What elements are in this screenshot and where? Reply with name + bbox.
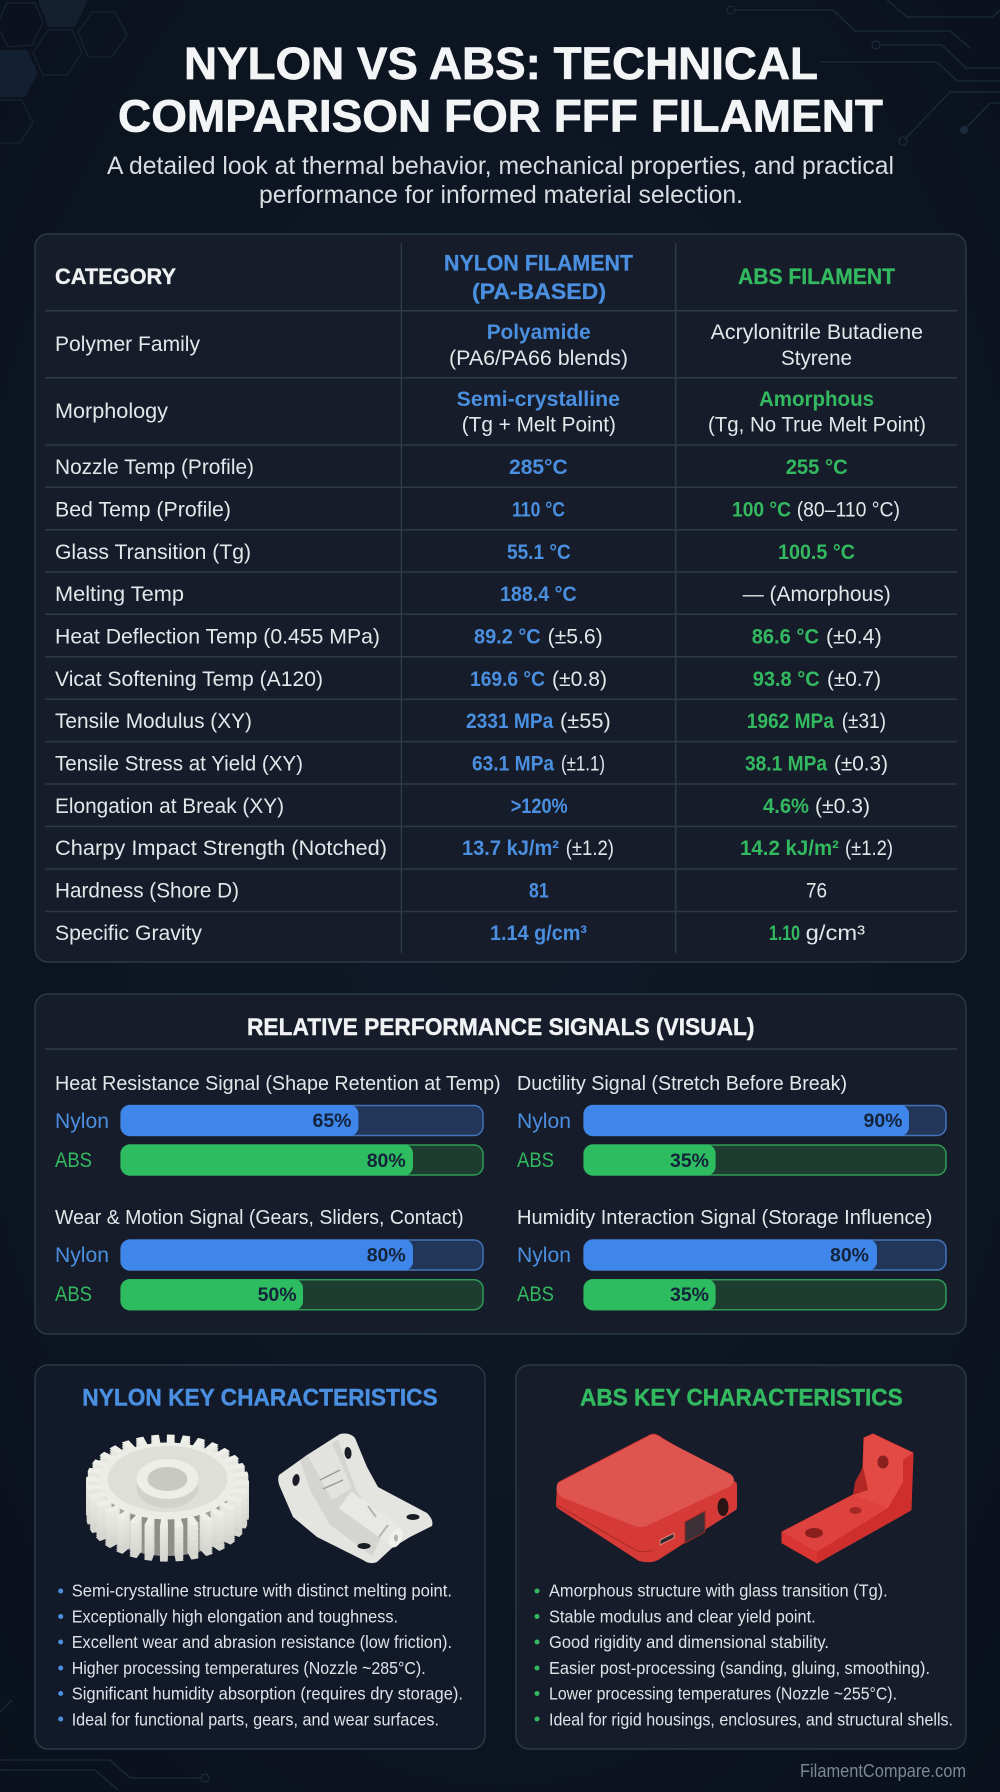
- row: nozzle temp: 285°C: [509, 456, 568, 479]
- row: specific gravity: 1.10: [769, 922, 800, 945]
- row: tensile modulus: 1962 MPa: [747, 710, 834, 733]
- row: melting temp: [55, 583, 891, 606]
- row: tensile stress at yield: (±0.3): [834, 752, 888, 776]
- chart: ductility signal: Nylon: [517, 1110, 571, 1133]
- row: elongation at break: 4.6%: [763, 795, 809, 818]
- chart: heat resistance signal: [55, 1072, 501, 1176]
- panel: relative performance signals: [35, 994, 966, 1334]
- chart: humidity interaction signal: [517, 1206, 946, 1310]
- row: heat deflection temp: (±0.4): [826, 626, 882, 648]
- nylon bullet list: Ideal for functional parts, gears, and wear surfaces.: [72, 1710, 439, 1730]
- row: charpy impact strength: 13.7 kJ/m²: [462, 837, 559, 860]
- row: bed temp: Bed Temp (Profile): [55, 498, 231, 522]
- row: vicat softening temp: (±0.7): [827, 668, 881, 691]
- row: polymer family: (PA6/PA66 blends): [449, 347, 628, 370]
- row: heat deflection temp: 86.6 °C: [752, 626, 819, 648]
- row: charpy impact strength: 14.2 kJ/m²: [740, 837, 839, 860]
- nylon bullet list: [58, 1581, 463, 1730]
- row: specific gravity: [55, 922, 865, 945]
- chart: wear and motion signal: 80%: [367, 1244, 406, 1266]
- row: specific gravity: g/cm³: [806, 922, 865, 945]
- row: glass transition: Glass Transition (Tg): [55, 541, 251, 564]
- row: tensile modulus: 2331 MPa: [466, 710, 554, 733]
- row: heat deflection temp: [55, 626, 882, 648]
- row: polymer family: Acrylonitrile Butadiene: [711, 321, 923, 344]
- icon: white nylon hinge bracket: [278, 1434, 432, 1563]
- row: polymer family: Polyamide: [487, 321, 591, 344]
- nylon bullet list: Significant humidity absorption (requires dry storage).: [72, 1684, 463, 1704]
- row: vicat softening temp: [55, 668, 881, 691]
- nylon bullet list: Exceptionally high elongation and toughness.: [72, 1606, 398, 1626]
- abs bullet list: [534, 1581, 953, 1730]
- row: hardness: Hardness (Shore D): [55, 880, 239, 902]
- row: polymer family: [55, 321, 923, 370]
- row: elongation at break: >120%: [511, 795, 568, 818]
- chart: ductility signal: Ductility Signal (Stretch Before Break): [517, 1072, 847, 1095]
- table header row: NYLON FILAMENT: [444, 250, 634, 276]
- footer credit: FilamentCompare.com: [800, 1761, 966, 1781]
- chart: wear and motion signal: Wear & Motion Signal (Gears, Sliders, Contact): [55, 1206, 464, 1229]
- signals heading: RELATIVE PERFORMANCE SIGNALS (VISUAL): [247, 1014, 754, 1041]
- row: melting temp: — (Amorphous): [743, 583, 891, 606]
- table header row: ABS FILAMENT: [738, 264, 896, 289]
- row: nozzle temp: 255 °C: [786, 456, 848, 479]
- row: bed temp: [55, 498, 900, 522]
- title: COMPARISON FOR FFF FILAMENT: [118, 90, 883, 142]
- title: NYLON VS ABS: TECHNICAL: [184, 38, 818, 89]
- icon: red abs enclosure: [557, 1438, 733, 1558]
- row: tensile stress at yield: [55, 752, 888, 776]
- row: specific gravity: Specific Gravity: [55, 922, 203, 945]
- row: nozzle temp: Nozzle Temp (Profile): [55, 456, 254, 479]
- abs bullet list: Good rigidity and dimensional stability.: [549, 1632, 829, 1652]
- row: tensile stress at yield: Tensile Stress at Yield (XY): [55, 752, 303, 776]
- chart: ductility signal: 90%: [864, 1110, 902, 1132]
- row: elongation at break: (±0.3): [815, 795, 870, 818]
- row: vicat softening temp: 93.8 °C: [753, 668, 820, 691]
- row: vicat softening temp: (±0.8): [552, 668, 607, 691]
- row: hardness: 81: [529, 880, 549, 902]
- table header row: CATEGORY: [55, 264, 176, 289]
- subtitle: performance for informed material selection.: [259, 181, 743, 209]
- row: morphology: (Tg + Melt Point): [462, 414, 616, 437]
- title: [118, 38, 883, 142]
- row: bed temp: (80–110 °C): [797, 498, 900, 522]
- row: melting temp: 188.4 °C: [500, 583, 577, 606]
- panel: nylon key characteristics: [35, 1365, 485, 1749]
- row: morphology: Semi-crystalline: [457, 388, 620, 411]
- nylon bullet list: Excellent wear and abrasion resistance (low friction).: [72, 1632, 452, 1652]
- chart: wear and motion signal: [55, 1206, 483, 1310]
- row: elongation at break: Elongation at Break (XY): [55, 795, 284, 818]
- row: charpy impact strength: (±1.2): [566, 837, 614, 860]
- table header row: [55, 250, 896, 304]
- icon: red abs bracket: [782, 1434, 913, 1563]
- row: heat deflection temp: (±5.6): [548, 626, 603, 648]
- chart: ductility signal: ABS: [517, 1149, 554, 1172]
- nylon heading: NYLON KEY CHARACTERISTICS: [82, 1384, 438, 1412]
- table background: [35, 234, 966, 962]
- chart: wear and motion signal: Nylon: [55, 1244, 109, 1267]
- subtitle: A detailed look at thermal behavior, mechanical properties, and practical: [107, 152, 894, 180]
- abs bullet list: Amorphous structure with glass transition (Tg).: [549, 1581, 888, 1601]
- row: morphology: Amorphous: [759, 388, 874, 411]
- row: heat deflection temp: 89.2 °C: [474, 626, 541, 648]
- chart: humidity interaction signal: 80%: [830, 1244, 869, 1266]
- row: tensile modulus: (±55): [560, 710, 611, 733]
- row: morphology: (Tg, No True Melt Point): [708, 414, 926, 437]
- row: tensile modulus: Tensile Modulus (XY): [55, 710, 252, 733]
- row: morphology: Morphology: [55, 400, 169, 423]
- chart: heat resistance signal: 65%: [312, 1110, 352, 1132]
- table header row: (PA-BASED): [472, 279, 606, 304]
- signals background: [35, 994, 966, 1334]
- row: tensile modulus: (±31): [842, 710, 886, 733]
- row: charpy impact strength: (±1.2): [845, 837, 893, 860]
- chart: humidity interaction signal: ABS: [517, 1283, 554, 1306]
- row: morphology: [55, 388, 926, 437]
- row: glass transition: 55.1 °C: [507, 541, 571, 564]
- icon: white nylon gear: [94, 1439, 242, 1557]
- row: vicat softening temp: 169.6 °C: [470, 668, 545, 691]
- chart: wear and motion signal: 50%: [258, 1284, 297, 1306]
- panel: comparison table: [35, 234, 966, 962]
- chart: wear and motion signal: ABS: [55, 1283, 92, 1306]
- row: glass transition: [55, 541, 855, 564]
- chart: ductility signal: [517, 1072, 946, 1176]
- row: specific gravity: 1.14 g/cm³: [490, 922, 587, 945]
- nylon bullet list: Semi-crystalline structure with distinct melting point.: [72, 1581, 452, 1601]
- row: nozzle temp: [55, 456, 848, 479]
- abs heading: ABS KEY CHARACTERISTICS: [580, 1384, 903, 1412]
- abs bullet list: Ideal for rigid housings, enclosures, and structural shells.: [549, 1710, 953, 1730]
- chart: heat resistance signal: 80%: [367, 1150, 406, 1172]
- row: hardness: 76: [806, 880, 827, 902]
- row: vicat softening temp: Vicat Softening Temp (A120): [55, 668, 323, 691]
- row: charpy impact strength: Charpy Impact Strength (Notched): [55, 837, 387, 860]
- row: polymer family: Polymer Family: [55, 333, 200, 356]
- row: melting temp: Melting Temp: [55, 583, 184, 606]
- chart: heat resistance signal: Nylon: [55, 1110, 109, 1133]
- row: tensile stress at yield: 63.1 MPa: [472, 752, 554, 776]
- panel: abs key characteristics: [516, 1365, 966, 1749]
- abs bullet list: Easier post-processing (sanding, gluing, smoothing).: [549, 1658, 930, 1678]
- chart: heat resistance signal: Heat Resistance Signal (Shape Retention at Temp): [55, 1072, 501, 1095]
- row: glass transition: 100.5 °C: [778, 541, 855, 564]
- row: tensile stress at yield: (±1.1): [561, 752, 605, 776]
- row: bed temp: 100 °C: [732, 498, 791, 522]
- chart: ductility signal: 35%: [670, 1150, 709, 1172]
- nylon panel background: [35, 1365, 485, 1749]
- chart: humidity interaction signal: Nylon: [517, 1244, 571, 1267]
- subtitle: [107, 152, 894, 209]
- row: tensile modulus: [55, 710, 886, 733]
- chart: humidity interaction signal: 35%: [670, 1284, 709, 1306]
- abs bullet list: Stable modulus and clear yield point.: [549, 1606, 816, 1626]
- chart: humidity interaction signal: Humidity Interaction Signal (Storage Influence): [517, 1206, 932, 1229]
- row: heat deflection temp: Heat Deflection Temp (0.455 MPa): [55, 626, 380, 648]
- row: charpy impact strength: [55, 837, 893, 860]
- abs panel background: [516, 1365, 966, 1749]
- abs bullet list: Lower processing temperatures (Nozzle ~255°C).: [549, 1684, 897, 1704]
- row: elongation at break: [55, 795, 870, 818]
- row: hardness: [55, 880, 827, 902]
- table grid: [45, 243, 957, 953]
- row: bed temp: 110 °C: [512, 498, 565, 522]
- row: polymer family: Styrene: [781, 347, 852, 370]
- chart: heat resistance signal: ABS: [55, 1149, 92, 1172]
- nylon bullet list: Higher processing temperatures (Nozzle ~285°C).: [72, 1658, 426, 1678]
- row: tensile stress at yield: 38.1 MPa: [745, 752, 827, 776]
